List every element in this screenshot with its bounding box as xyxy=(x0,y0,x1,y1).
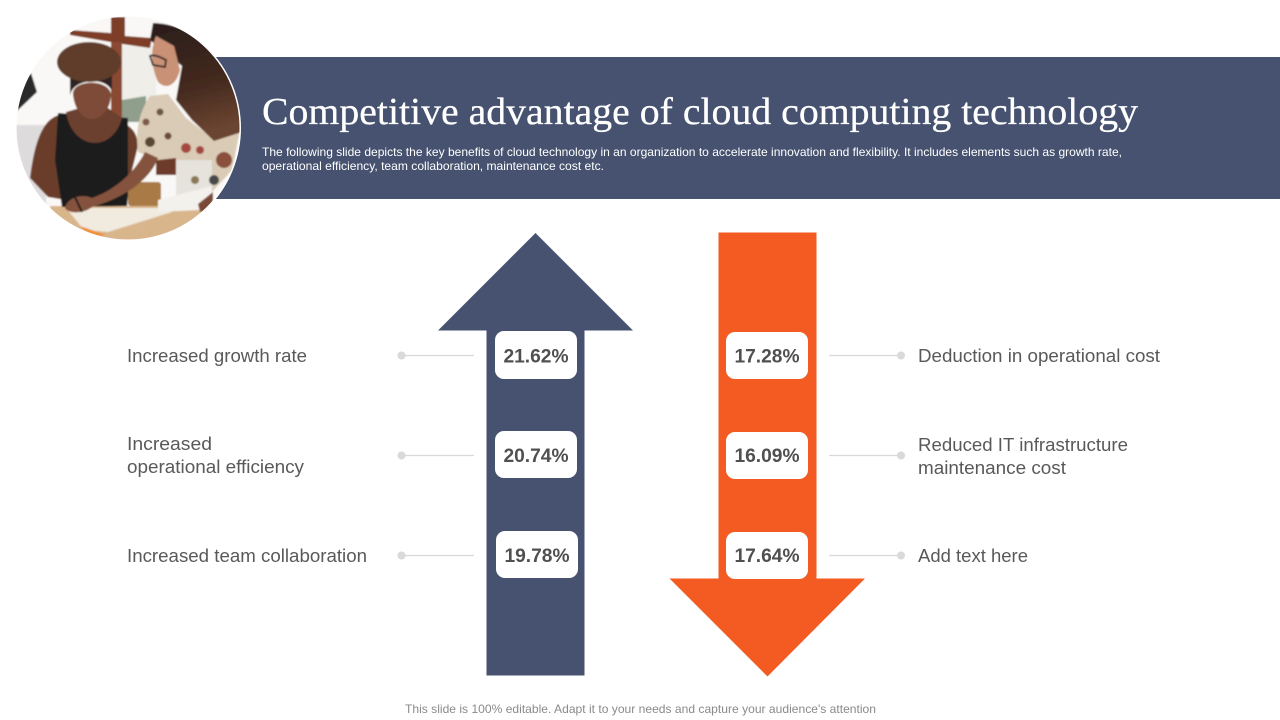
right item: reduced IT infrastructure maintenance cost xyxy=(829,434,1128,478)
book xyxy=(158,186,212,212)
blouse xyxy=(137,94,240,196)
left item: increased growth rate: Increased growth rate xyxy=(127,345,307,366)
value: 20.74%: 20.74% xyxy=(503,446,569,467)
footer note: This slide is 100% editable. Adapt it to your needs and capture your audience's attention xyxy=(405,702,876,716)
left item: increased operational efficiency xyxy=(127,433,474,477)
right item: deduction in operational cost: Deduction in operational cost xyxy=(918,345,1160,366)
left item: increased operational efficiency: Increased xyxy=(127,433,212,454)
right item: reduced IT infrastructure maintenance cost: Reduced IT infrastructure xyxy=(918,434,1128,455)
value: 17.28% xyxy=(726,332,808,379)
value: 17.64%: 17.64% xyxy=(734,546,800,567)
value: 19.78%: 19.78% xyxy=(504,546,570,567)
right item: add text here xyxy=(829,545,1028,566)
right item: add text here: Add text here xyxy=(918,545,1028,566)
value: 16.09% xyxy=(726,432,808,479)
writing arm xyxy=(65,152,158,212)
value: 17.28%: 17.28% xyxy=(734,346,800,368)
left item: increased growth rate xyxy=(127,345,474,366)
title: Competitive advantage of cloud computing technology xyxy=(262,91,1139,133)
window xyxy=(122,46,156,100)
desk and paper xyxy=(50,206,205,240)
circular photo: two women working at a desk xyxy=(15,15,242,241)
description: The following slide depicts the key benefits of cloud technology in an organization to accelerate innovation and flexibility. It includes elements such as growth rate, xyxy=(262,146,1122,159)
value: 21.62% xyxy=(495,331,577,379)
description xyxy=(262,146,1122,173)
standing woman face xyxy=(152,36,180,86)
value: 17.64% xyxy=(726,532,808,579)
right item: reduced IT infrastructure maintenance cost: maintenance cost xyxy=(918,457,1066,478)
value: 20.74% xyxy=(495,431,577,478)
up arrow xyxy=(438,233,633,676)
seated woman xyxy=(30,115,66,200)
down arrow xyxy=(670,232,865,676)
value: 16.09%: 16.09% xyxy=(734,446,800,467)
standing woman hair xyxy=(150,23,242,141)
header band xyxy=(200,57,1280,199)
value: 19.78% xyxy=(496,531,578,578)
room xyxy=(17,16,228,206)
left item: increased team collaboration: Increased team collaboration xyxy=(127,545,367,566)
left item: increased team collaboration xyxy=(127,545,474,566)
description: operational efficiency, team collaboration, maintenance cost etc. xyxy=(262,160,604,173)
value: 21.62%: 21.62% xyxy=(503,346,569,368)
left item: increased operational efficiency: operational efficiency xyxy=(127,456,305,477)
